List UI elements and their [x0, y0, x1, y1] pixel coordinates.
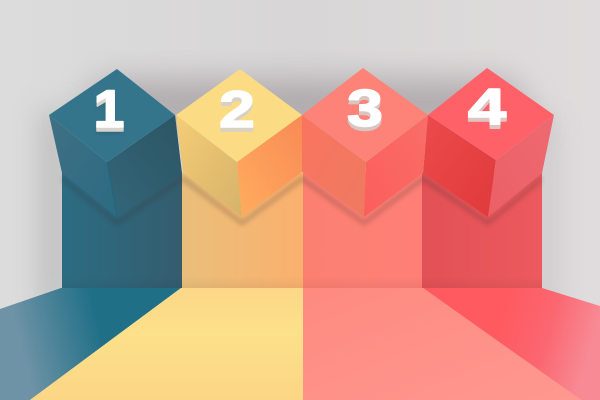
left wall shadow — [42, 110, 66, 310]
cube 2: yellow — [176, 69, 302, 217]
cube shadow on wall — [70, 80, 540, 130]
floor strip: salmon — [303, 288, 581, 400]
wall base shading — [62, 276, 542, 288]
cube 3: salmon — [302, 68, 428, 217]
wall strip: salmon — [303, 173, 422, 288]
right wall shadow — [538, 120, 554, 310]
floor strip: red — [423, 288, 600, 400]
wall strip: red — [422, 173, 542, 288]
number 4: 4 — [468, 78, 507, 135]
number 1: 1 — [94, 83, 124, 143]
number 4: 4 — [468, 82, 507, 139]
number 1: 1 — [94, 79, 124, 139]
number 3: 3 — [347, 80, 383, 138]
cube 1: teal — [49, 69, 182, 217]
number 3: 3 — [347, 84, 383, 142]
wall strip: yellow — [182, 173, 303, 288]
number 2: 2 — [219, 81, 255, 139]
number 2: 2 — [219, 85, 255, 143]
cube 4: red — [423, 68, 554, 217]
number 1: 1 — [93, 86, 123, 146]
wall strip: teal — [62, 173, 182, 288]
floor strip: teal — [0, 288, 181, 400]
cube contact shadows — [62, 175, 542, 226]
floor strip: yellow — [30, 288, 303, 400]
